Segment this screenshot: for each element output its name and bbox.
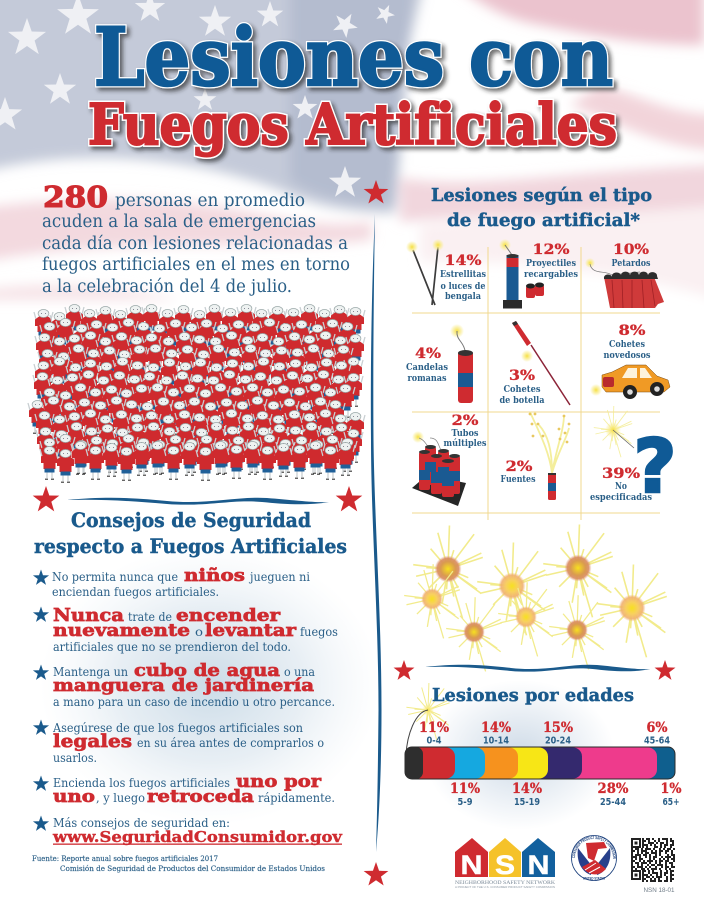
crowd of people illustration	[28, 304, 365, 482]
tip 4: usarlos.	[53, 750, 97, 765]
title: Lesiones con	[94, 10, 613, 104]
intro statistic text: 280	[43, 180, 108, 214]
intro statistic text: fuegos artificiales en el mes en torno	[42, 255, 350, 275]
icon: fountain, 2%	[500, 412, 570, 500]
title: Fuegos Artificiales	[88, 92, 617, 158]
age bar chart: 0-4	[426, 736, 442, 746]
tip 5: rápidamente.	[258, 790, 335, 805]
age bar chart: 28%	[598, 781, 628, 797]
icon: multiple tubes, 2%: múltiples	[444, 438, 486, 449]
intro statistic text: acuden a la sala de emergencias	[42, 212, 316, 232]
tip 2: artificiales que no se prendieron del todo.	[53, 639, 291, 654]
source note: Fuente: Reporte anual sobre fuegos artificiales 2017	[32, 855, 218, 863]
tip 6 with website: www.SeguridadConsumidor.gov	[52, 828, 343, 846]
source note	[32, 855, 325, 873]
icon: roman candle, 4%	[406, 324, 473, 403]
logo: Neighborhood Safety Network: A PROJECT OF THE U.S. CONSUMER PRODUCT SAFETY COMMISSION	[455, 885, 555, 889]
tip 2: nuevamente	[53, 621, 190, 641]
icon: novelty car, 8%: Cohetes	[609, 339, 645, 350]
heading: injuries by type: Lesiones según el tipo	[431, 185, 652, 206]
icon: multiple tubes, 2%: Tubos	[452, 428, 478, 439]
tip 4: legales	[53, 731, 132, 752]
age bar chart: 6%	[646, 720, 668, 736]
icon: question mark and spark, 39%: ?	[634, 424, 676, 510]
tip 3: o una	[284, 664, 315, 679]
icon: reloadable shells, 12%: recargables	[524, 269, 578, 280]
age heading with stars and wave	[394, 660, 675, 706]
flag stars	[0, 0, 398, 197]
age bar chart: 14%	[512, 781, 542, 797]
icon: fountain, 2%: Fuentes	[500, 474, 536, 485]
intro statistic text	[42, 180, 350, 297]
icon: multiple tubes, 2%: 2%	[452, 413, 478, 429]
safety heading with stars and wave: respecto a Fuegos Artificiales	[34, 534, 347, 558]
logo: Neighborhood Safety Network: N	[460, 850, 482, 880]
tip 2: fuegos	[300, 624, 338, 639]
icon: question mark and spark, 39%: 39%	[602, 466, 640, 482]
tip 1: enciendan fuegos artificiales.	[52, 584, 219, 599]
age bar chart: fuse and spark	[406, 683, 450, 755]
logo: Neighborhood Safety Network	[455, 838, 555, 889]
QR code: NSN 18-01	[644, 887, 675, 894]
logo: Neighborhood Safety Network: NEIGHBORHOOD SAFETY NETWORK	[455, 880, 555, 886]
age bar chart: 20-24	[545, 736, 571, 746]
tip 5: uno por	[236, 772, 322, 792]
icon: reloadable shells, 12%: 12%	[532, 242, 570, 258]
title: Lesiones con	[94, 10, 613, 104]
age bar chart: 1%	[660, 781, 682, 797]
icon: firecrackers, 10%: Petardos	[612, 258, 650, 269]
icon: firecrackers, 10%	[585, 242, 664, 308]
grid lines	[412, 247, 660, 520]
tip 1	[33, 566, 310, 599]
icon: bottle rocket, 3%	[500, 321, 570, 406]
tip 5: , y luego	[96, 790, 145, 805]
tip 2: o	[195, 624, 203, 639]
icon: reloadable shells, 12%: Proyectiles	[526, 258, 576, 269]
age bar chart: 5-9	[458, 797, 472, 808]
icon: sparklers, 14%: o luces de	[440, 281, 486, 292]
tip 3: manguera de jardinería	[53, 676, 314, 696]
fireworks illustration	[404, 524, 667, 671]
tip 6 with website	[33, 815, 343, 846]
icon: bottle rocket, 3%: 3%	[509, 368, 535, 384]
tip 5: retroceda	[147, 787, 254, 807]
tip 2	[33, 605, 338, 654]
icon: question mark and spark, 39%: No	[615, 481, 627, 492]
icon: question mark and spark, 39%	[590, 406, 676, 510]
icon: novelty car, 8%: 8%	[618, 323, 646, 339]
intro statistic text: personas en promedio	[115, 191, 305, 211]
source note: Comisión de Seguridad de Productos del Consumidor de Estados Unidos	[60, 865, 325, 873]
tip 2: Nunca	[53, 605, 124, 626]
tip 2: levantar	[205, 621, 297, 641]
icon: question mark and spark, 39%: especificadas	[590, 492, 652, 503]
logo: CPSC seal	[571, 835, 617, 881]
tip 2: encender	[176, 606, 281, 626]
logo: CPSC seal: CONSUMER PRODUCT SAFETY COMMISSION	[572, 836, 616, 858]
icon: bottle rocket, 3%: Cohetes	[504, 384, 540, 395]
tip 1: jueguen ni	[248, 569, 310, 584]
heading: injuries by type	[431, 185, 652, 231]
tip 4: Asegúrese de que los fuegos artificiales son	[52, 720, 303, 735]
safety heading with stars and wave: Consejos de Seguridad	[71, 508, 311, 532]
age heading with stars and wave: Lesiones por edades	[432, 685, 634, 706]
icon: sparklers, 14%: bengala	[445, 291, 481, 302]
QR code	[631, 838, 675, 894]
tip 1: niños	[184, 566, 245, 586]
logo: CPSC seal: UNITED STATES	[583, 876, 605, 880]
age bar chart: 15%	[543, 720, 573, 736]
age bar chart: 25-44	[600, 797, 626, 808]
tip 4	[33, 720, 324, 765]
icon: roman candle, 4%: romanas	[408, 373, 446, 384]
tip 6 with website: Más consejos de seguridad en:	[53, 815, 230, 830]
icon: novelty car, 8%	[590, 323, 670, 399]
tip 3	[33, 661, 335, 709]
icon: fountain, 2%: 2%	[506, 459, 532, 475]
central divider with stars	[364, 180, 388, 886]
age bar chart: 11%	[419, 720, 449, 736]
age bar chart: 10-14	[483, 736, 509, 746]
title: Fuegos Artificiales	[88, 92, 617, 158]
tip 5	[33, 772, 335, 807]
icon: reloadable shells, 12%	[499, 239, 578, 308]
logo: Neighborhood Safety Network: N	[528, 850, 550, 880]
tip 3: cubo de agua	[134, 661, 280, 681]
tip 4: en su área antes de comprarlos o	[137, 735, 324, 750]
tip 1: No permita nunca que	[52, 569, 178, 584]
tip 2: trate de	[128, 609, 172, 624]
icon: bottle rocket, 3%: de botella	[500, 395, 544, 406]
tip 5: uno	[53, 787, 95, 807]
intro statistic text: a la celebración del 4 de julio.	[42, 277, 292, 297]
tip 3: a mano para un caso de incendio u otro percance.	[53, 694, 335, 709]
icon: multiple tubes, 2%	[412, 413, 486, 506]
title	[88, 10, 617, 158]
age bar chart: 15-19	[514, 797, 540, 808]
age bar chart: 45-64	[644, 736, 670, 746]
intro statistic text: cada día con lesiones relacionadas a	[42, 234, 348, 254]
heading: injuries by type: de fuego artificial*	[447, 210, 641, 231]
tip 3: Mantenga un	[53, 664, 128, 679]
age bar chart: 65+	[662, 797, 680, 808]
icon: sparklers, 14%: 14%	[444, 253, 482, 269]
age bar chart: 14%	[481, 720, 511, 736]
icon: roman candle, 4%: Candelas	[406, 362, 448, 373]
safety heading with stars and wave	[33, 486, 362, 558]
tip 5: Encienda los fuegos artificiales	[53, 775, 230, 790]
age bar chart: 11%	[450, 781, 480, 797]
age bar chart	[405, 720, 682, 808]
icon: sparklers, 14%	[406, 239, 486, 305]
icon: roman candle, 4%: 4%	[415, 346, 441, 362]
icon: novelty car, 8%: novedosos	[604, 350, 650, 361]
icon: sparklers, 14%: Estrellitas	[440, 269, 486, 280]
logo: Neighborhood Safety Network: S	[495, 850, 515, 880]
icon: firecrackers, 10%: 10%	[613, 242, 649, 258]
